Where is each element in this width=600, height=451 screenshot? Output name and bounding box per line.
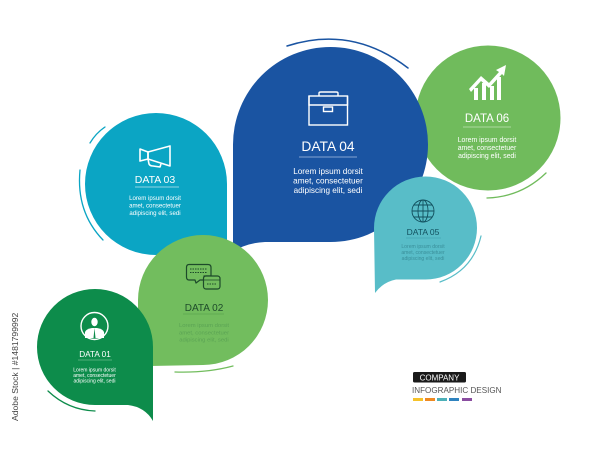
icon: growth chart (469, 65, 506, 100)
text: data 01: amet, consectetuer (73, 373, 116, 379)
panel: data 04 (233, 39, 428, 252)
side credit: Adobe Stock | #1481799992 (10, 312, 20, 421)
arc: data 06 (487, 173, 546, 198)
text: data 06: adipiscing elit, sedi (458, 153, 516, 160)
text: data 03: Lorem ipsum dorsit (129, 195, 181, 202)
panel: data 03 (79, 113, 227, 262)
icon: person in circle (81, 312, 108, 340)
logo subtitle: INFOGRAPHIC DESIGN (412, 386, 502, 395)
bubble: data 02 (138, 235, 268, 366)
panel: data 01 (37, 289, 153, 421)
icon: globe (412, 200, 434, 222)
bubble: data 05 (374, 176, 477, 293)
bubble: data 03 (85, 113, 227, 262)
text: data 02: adipiscing elit, sedi (179, 338, 229, 344)
arcs: data 03 (79, 127, 105, 240)
heading: data 02: DATA 02 (185, 303, 224, 314)
text: data 06: Lorem ipsum dorsit (458, 137, 516, 144)
icon: briefcase (309, 92, 348, 125)
arc: data 02 (175, 366, 233, 372)
arc: data 04 (287, 39, 408, 68)
text: data 03: amet, consectetuer (129, 202, 181, 210)
text: data 02: amet, consectetuer (179, 330, 229, 336)
panel: data 05 (374, 176, 481, 293)
heading: data 05: DATA 05 (407, 227, 440, 237)
panel: data 02 (138, 235, 268, 372)
arc: data 05 (440, 236, 481, 282)
heading: data 03: DATA 03 (135, 174, 175, 186)
panel: data 06 (416, 46, 560, 198)
text: data 05: amet, consectetuer (401, 250, 445, 256)
icon: chat bubbles (186, 264, 220, 289)
text: data 06: amet, consectetuer (458, 145, 517, 152)
text: data 05: adipiscing elit, sedi (402, 256, 444, 262)
text: data 01: adipiscing elit, sedi (74, 378, 115, 384)
heading: data 01: DATA 01 (79, 350, 111, 359)
logo block (412, 372, 502, 401)
icon: megaphone (140, 146, 170, 167)
text: data 01: Lorem ipsum dorsit (73, 368, 116, 374)
text: data 04: amet, consectetuer (293, 176, 363, 186)
text: data 05: Lorem ipsum dorsit (401, 244, 445, 250)
colour swatches (413, 398, 472, 401)
text: data 03: adipiscing elit, sedi (129, 210, 181, 217)
text: data 04: adipiscing elit, sedi (294, 186, 363, 195)
arc: data 01 (48, 391, 95, 411)
company badge: COMPANY (420, 374, 460, 382)
text: data 04: Lorem ipsum dorsit (293, 167, 364, 176)
bubble: data 06 (416, 46, 560, 190)
bubble: data 04 (233, 47, 428, 252)
heading: data 06: DATA 06 (465, 113, 509, 125)
heading: data 04: DATA 04 (301, 139, 355, 154)
text: data 02: Lorem ipsum dorsit (179, 323, 229, 329)
bubble: data 01 (37, 289, 153, 421)
